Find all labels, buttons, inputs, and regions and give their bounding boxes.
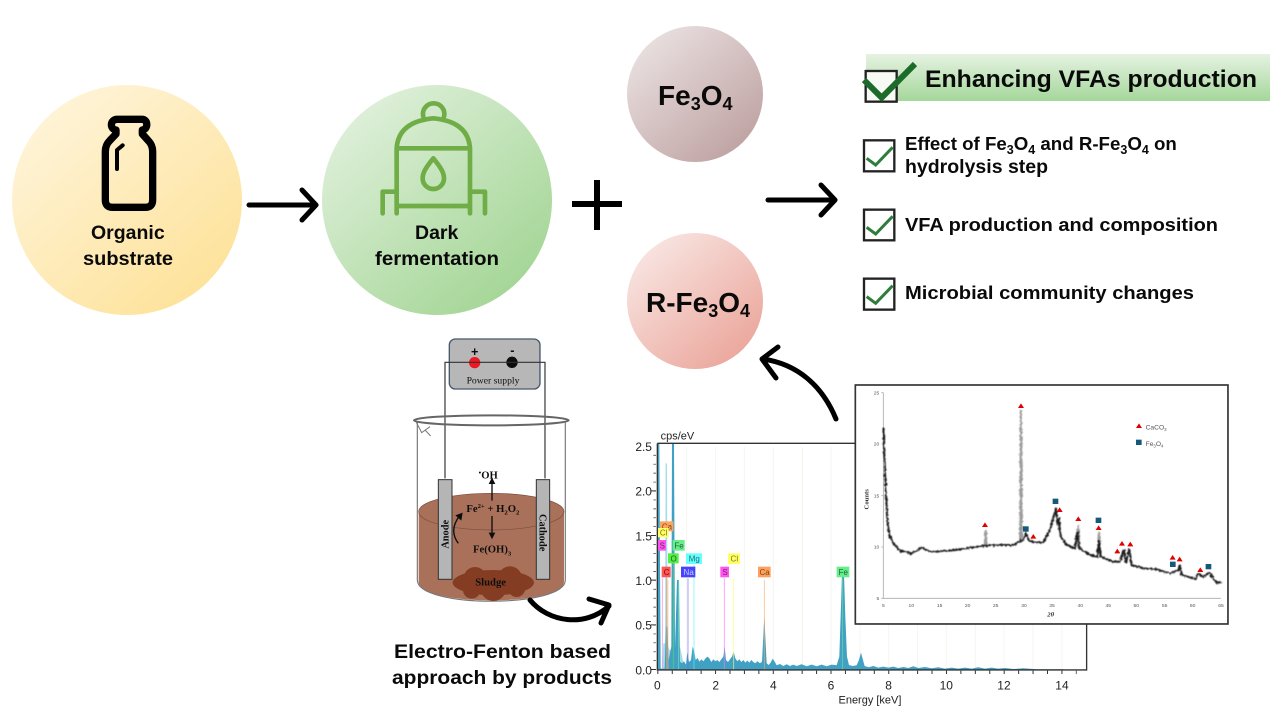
element labels: C [664,568,670,577]
icon: bottle [105,119,153,207]
spectrum fill [657,443,1063,670]
axis labels: 5 [882,603,885,609]
axis labels: 25 [993,603,999,609]
axis labels: 40 [1078,603,1083,609]
label: dark fermentation: Dark [415,222,459,244]
circle: organic substrate [12,85,242,315]
element labels: Fe [674,541,684,550]
cathode [536,480,550,579]
axis labels: 0.0 [635,663,652,677]
caption: electro-Fenton [392,641,612,689]
element labels: S [660,541,665,550]
axis labels [635,430,1069,706]
arrow: substrate to fermentation [249,190,316,220]
reaction labels: • [479,468,482,477]
legend text: 4 [1161,443,1164,448]
element labels [658,521,849,577]
arrow: beaker to EDS [530,599,609,623]
label: R-Fe3O4: O [718,287,740,318]
element labels: Na [684,568,694,577]
axis labels: 0.5 [635,619,652,633]
label: dark fermentation [375,222,499,270]
axis labels [863,390,1224,618]
item: VFA production [864,210,1218,240]
power supply [449,339,540,389]
label: Fe3O4: 4 [722,94,732,114]
element labels: Ca [662,522,673,531]
reaction arrows [454,477,495,543]
element labels: Cl [660,528,668,537]
reaction labels: Fe [466,504,478,515]
reaction labels: 2 [516,510,520,517]
axis labels: 6 [828,678,835,692]
label: Fe3O4: Fe [658,80,691,111]
axis labels: 20 [965,603,971,609]
axis labels: 10 [909,603,914,609]
axis labels: 50 [1134,603,1139,609]
axis labels: 2.5 [635,440,652,454]
cathode: Cathode [537,514,548,552]
item: hydrolysis [864,133,1177,178]
caption: electro-Fenton: Electro-Fenton based [394,641,611,663]
plus sign [572,180,622,230]
element labels: Fe [839,568,849,577]
axis labels: 2 [712,678,719,692]
plot axes [881,393,1221,598]
axis labels: 60 [1190,603,1196,609]
label: Fe3O4: O [701,80,722,111]
wires [445,362,545,478]
diagram: electro-Fenton beaker [414,339,569,601]
axis labels: 55 [1162,603,1168,609]
axis labels: 10 [940,678,953,692]
reaction labels: Sludge [475,578,506,589]
axis labels: 4 [770,678,777,692]
liquid [419,493,564,600]
label: dark fermentation: fermentation [375,248,499,270]
label: organic substrate: substrate [83,248,173,270]
item: hydrolysis: on [1149,133,1177,154]
circle: dark fermentation [322,85,552,315]
power supply: - [510,344,514,358]
icon: fermenter tank [383,103,485,213]
power supply: + [471,345,478,359]
axis labels: 15 [874,493,880,499]
item: hydrolysis: Effect of Fe [905,133,1007,154]
item: hydrolysis: hydrolysis step [905,156,1048,178]
item: hydrolysis: O [1014,133,1028,154]
axis labels: 15 [937,603,943,609]
grid [687,447,1062,670]
axis labels: 30 [1021,603,1027,609]
reaction labels [466,468,520,589]
Fe3O4 markers [1023,440,1211,569]
legend text: O [1156,441,1161,448]
reaction labels: O [508,504,516,515]
item: hydrolysis: 4 [1028,143,1035,157]
circle: Fe3O4 [627,26,763,162]
diffraction curve [883,410,1221,583]
axis labels: 1.5 [635,529,652,543]
reaction labels: 3 [508,550,512,557]
item: hydrolysis: 3 [1007,143,1014,157]
anode: Anode [441,520,452,549]
axis labels: 20 [874,442,880,448]
panel frame [855,385,1228,624]
beaker glass [414,415,569,601]
reaction labels: Fe(OH) [473,545,508,556]
axis labels: 45 [1106,603,1111,609]
label: R-Fe3O4: 4 [740,301,750,321]
chart: XRD pattern [855,385,1228,624]
item: microbial community: Microbial community changes [905,282,1194,303]
axis labels: 0 [654,678,661,692]
axis labels: 35 [1049,603,1055,609]
legend text: 3 [1153,443,1156,448]
reaction labels: OH [481,470,499,481]
axis labels: 25 [874,390,880,396]
legend text [1146,425,1167,448]
label: Fe3O4: 3 [691,94,701,114]
sludge [453,566,534,601]
element labels: S [722,568,728,577]
axis labels: 1.0 [635,574,652,588]
reaction labels: + H [485,504,505,515]
heading banner [866,54,1270,101]
anode [438,480,452,579]
axis labels: Energy [keV] [839,694,901,706]
axes [653,443,1087,672]
caption: electro-Fenton: approach by products [392,667,612,689]
chart: EDS spectrum [635,430,1087,706]
CaCO3 markers [982,403,1203,572]
panel: outcomes [864,54,1270,310]
legend text: Fe [1146,441,1153,448]
label: organic substrate [83,222,173,270]
element lines [662,563,843,670]
item: hydrolysis: 3 [1120,143,1127,157]
label: organic substrate: Organic [91,222,165,244]
haze around low-energy peaks [662,463,685,670]
axis labels: 65 [1218,603,1224,609]
element labels: Cl [731,555,738,564]
arrow: XRD to R-Fe3O4 [762,347,836,419]
axis labels: cps/eV [661,430,695,442]
axis labels: Counts [863,489,870,510]
axis labels: 8 [885,678,892,692]
heading banner: Enhancing VFAs production [925,66,1257,93]
label: R-Fe3O4: R-Fe [646,287,708,318]
legend text: CaCO [1146,425,1164,432]
item: hydrolysis: and R-Fe [1035,133,1120,154]
axis labels: 2θ [1046,611,1055,618]
axis labels: 14 [1055,678,1069,692]
label: R-Fe3O4: 3 [708,301,718,321]
item: microbial community [864,279,1194,310]
reaction labels: 2+ [478,503,485,510]
item: VFA production: VFA production and composition [905,214,1218,235]
item: hydrolysis: O [1127,133,1142,154]
axis labels: 12 [997,678,1011,692]
axis labels: 2.0 [635,485,652,499]
axis labels: 10 [874,545,880,551]
circle: R-Fe3O4 [627,233,763,369]
element labels: Ca [760,568,770,577]
item: hydrolysis: 4 [1142,143,1149,157]
icon: large checkbox [864,64,915,102]
element labels: Mg [689,555,700,564]
power supply: Power supply [467,375,520,386]
element labels: O [671,554,677,563]
arrow: materials to outcomes [768,185,835,215]
legend text: 3 [1164,427,1167,432]
axis labels: 5 [877,596,880,602]
reaction labels: 2 [504,510,508,517]
